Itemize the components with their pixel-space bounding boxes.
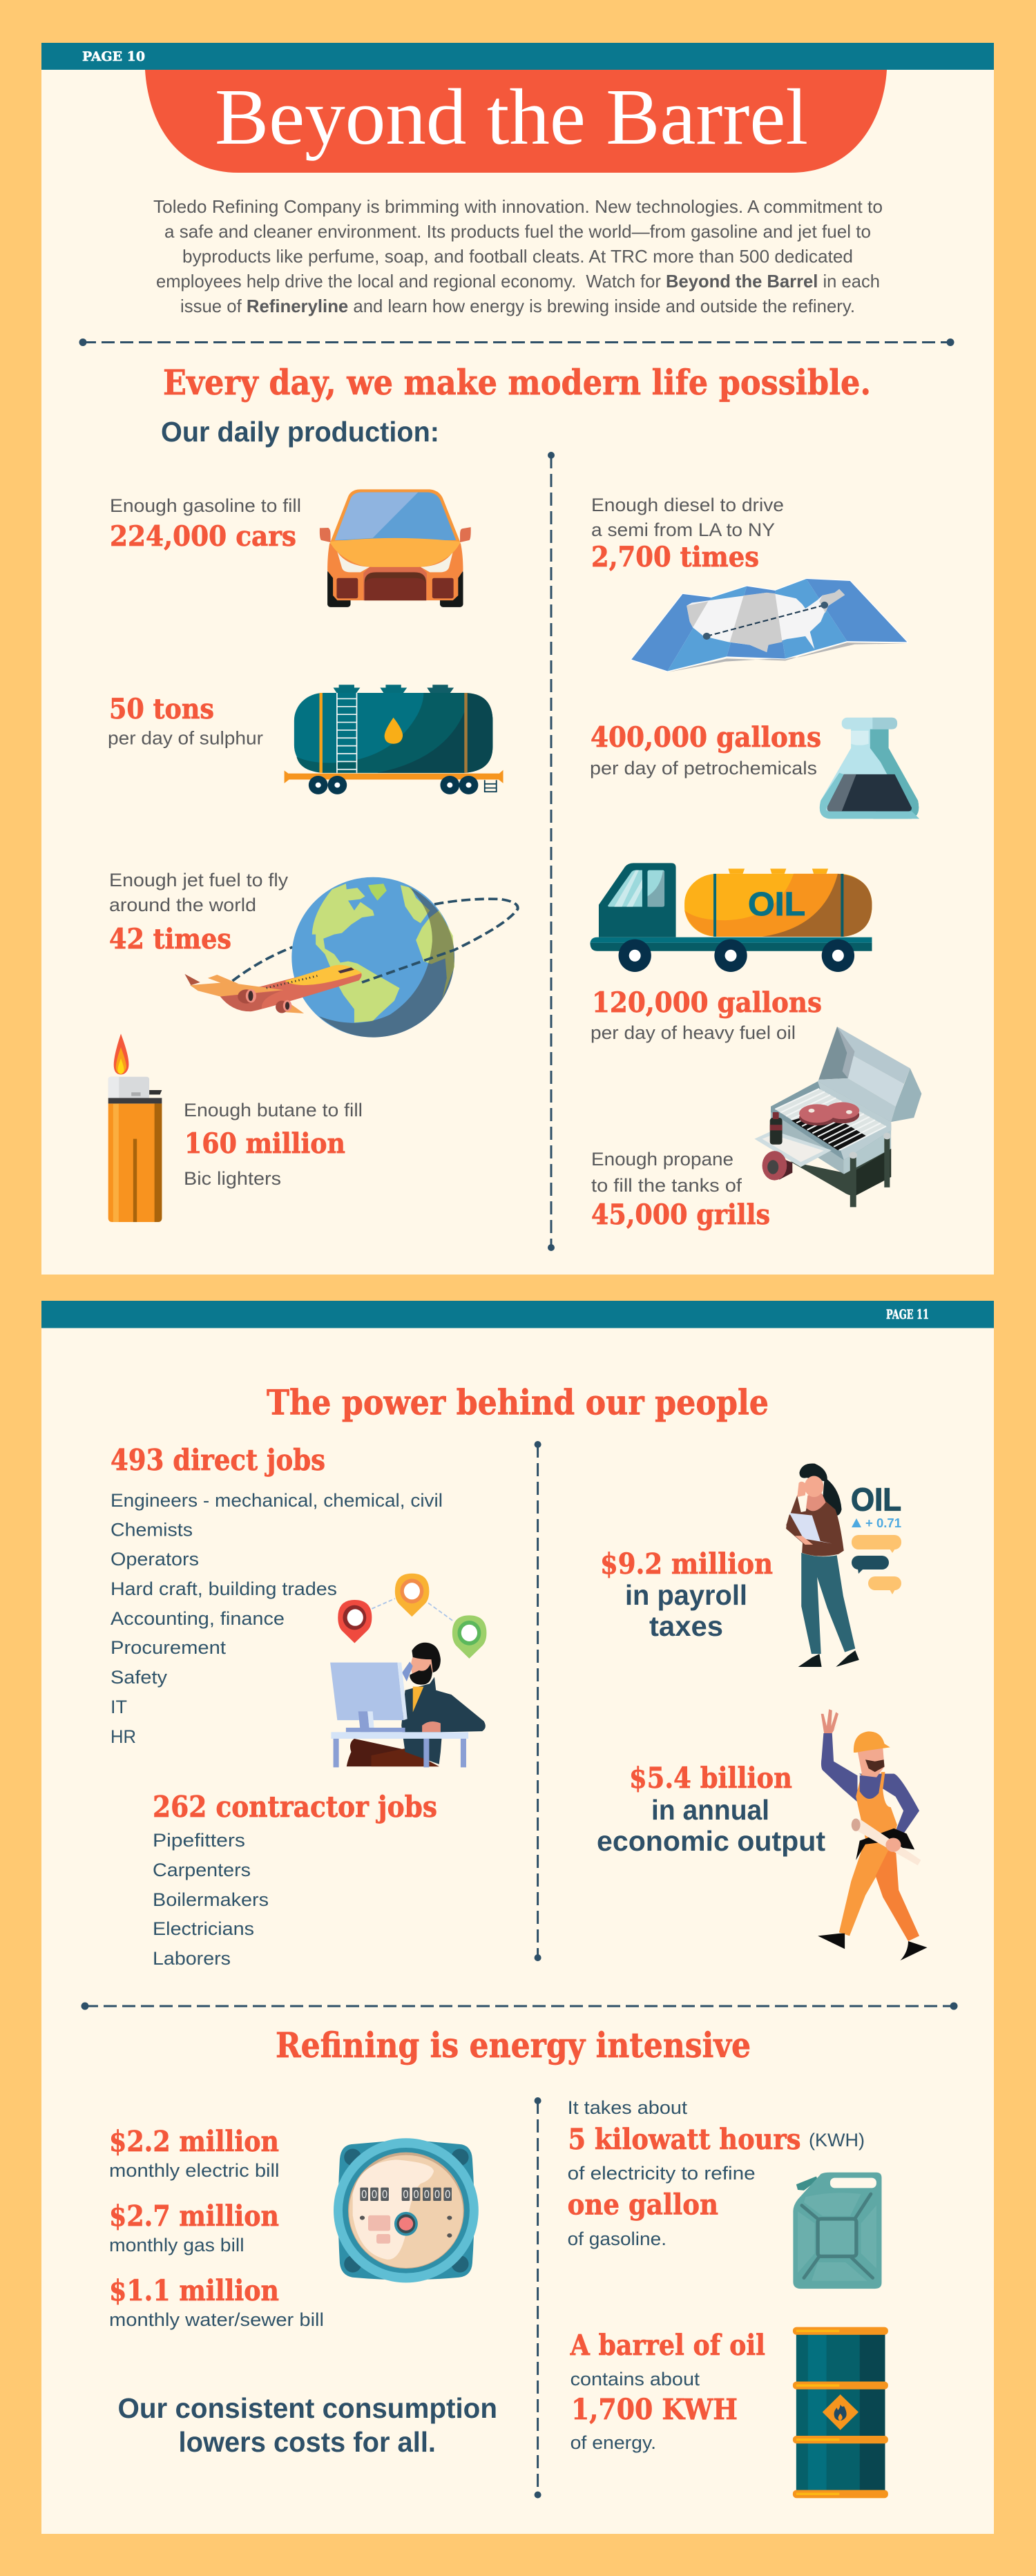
title banner xyxy=(145,70,887,173)
stat: diesel: 2,700 times xyxy=(591,541,759,573)
icon: globe and plane xyxy=(184,877,518,1038)
block: direct jobs: Safety xyxy=(111,1667,168,1688)
stat: kilowatt hours per gallon: one gallon xyxy=(568,2188,718,2222)
stat: kilowatt hours per gallon: It takes about xyxy=(568,2097,688,2118)
stat: economic output: in annual xyxy=(651,1794,769,1826)
block: contractor jobs: Boilermakers xyxy=(153,1889,269,1910)
stat: butane: 160 million xyxy=(184,1127,345,1160)
icon: construction worker xyxy=(818,1709,928,1960)
meter digits: 0 xyxy=(434,2188,440,2201)
block: contractor jobs: Carpenters xyxy=(153,1860,251,1880)
truck label: OIL: OIL xyxy=(748,886,805,923)
intro text block: issue of Refineryline and learn how energy is brewing inside and outside the refinery. xyxy=(180,296,855,316)
stat: petrochemicals: per day of petrochemicals xyxy=(590,758,817,779)
icon: grill xyxy=(754,1027,921,1207)
stat: kilowatt hours per gallon: 5 kilowatt hours xyxy=(568,2123,801,2156)
icon: car xyxy=(320,489,471,607)
intro text block: employees help drive the local and regional economy. Watch for Beyond the Barrel in each xyxy=(156,271,880,292)
block: contractor jobs: Laborers xyxy=(153,1948,231,1969)
stat: kilowatt hours per gallon: (KWH) xyxy=(809,2130,865,2150)
stat: barrel energy: A barrel of oil xyxy=(570,2329,765,2362)
stat: heavy fuel oil: 120,000 gallons xyxy=(592,986,822,1019)
block: direct jobs: Hard craft, building trades xyxy=(111,1578,337,1599)
meter digits: 0 xyxy=(361,2188,367,2201)
icon: plane xyxy=(184,965,362,1013)
intro text block: Toledo Refining Company is brimming with innovation. New technologies. A commitment to xyxy=(153,196,883,217)
icon: utility meter xyxy=(334,2138,479,2282)
stat: heavy fuel oil: per day of heavy fuel oil xyxy=(591,1022,796,1043)
graphic: OIL ticker and chat bubbles: OIL xyxy=(851,1481,901,1517)
icon: jerry can xyxy=(793,2173,881,2289)
stat: jet fuel xyxy=(109,870,289,955)
icon: lighter xyxy=(108,1033,162,1222)
block: contractor jobs: Electricians xyxy=(153,1918,254,1939)
stat: sulphur xyxy=(108,693,263,749)
block: direct jobs: 493 direct jobs xyxy=(111,1443,325,1477)
stat: barrel energy: contains about xyxy=(570,2369,700,2389)
block: direct jobs: Procurement xyxy=(111,1637,227,1658)
intro text block: byproducts like perfume, soap, and football cleats. At TRC more than 500 dedicated xyxy=(182,246,853,267)
stat: kilowatt hours per gallon: of electricity to refine xyxy=(568,2163,756,2184)
heading: refining is energy intensive: Refining is energy intensive xyxy=(276,2025,751,2065)
stat: petrochemicals xyxy=(590,721,821,779)
stat: monthly bills xyxy=(109,2125,324,2330)
stat: jet fuel: around the world xyxy=(109,895,256,915)
icon: oil truck xyxy=(590,863,872,972)
stat: payroll taxes: in payroll xyxy=(625,1579,747,1611)
stat: barrel energy: of energy. xyxy=(570,2432,656,2453)
stat: economic output xyxy=(597,1762,825,1857)
heading: every day: Every day, we make modern life possible. xyxy=(163,362,871,403)
stat: sulphur: per day of sulphur xyxy=(108,728,263,749)
stat: payroll taxes xyxy=(600,1547,773,1642)
stat: gasoline: Enough gasoline to fill xyxy=(110,495,301,516)
meter digits: 0 xyxy=(424,2188,430,2201)
stat: butane: Enough butane to fill xyxy=(184,1100,363,1120)
stat: propane: to fill the tanks of xyxy=(591,1175,742,1196)
meter digits: 0 xyxy=(403,2188,408,2201)
stat: barrel energy: 1,700 KWH xyxy=(571,2393,738,2426)
icon: tank rail car xyxy=(285,685,503,794)
intro text block: a safe and cleaner environment. Its products fuel the world—from gasoline and jet fuel to xyxy=(164,221,871,242)
meter digits: 0 xyxy=(372,2188,377,2201)
stat: payroll taxes: taxes xyxy=(649,1610,723,1642)
icon: man at computer with map pins xyxy=(330,1574,486,1767)
stat: monthly bills: monthly gas bill xyxy=(109,2235,244,2255)
stat: jet fuel: Enough jet fuel to fly xyxy=(109,870,289,890)
stat: economic output: $5.4 billion xyxy=(629,1762,792,1795)
stat: gasoline xyxy=(110,495,301,553)
stat: barrel energy xyxy=(570,2329,765,2453)
block: direct jobs: Accounting, finance xyxy=(111,1608,285,1629)
title banner: Beyond the Barrel xyxy=(215,73,808,161)
heading: our daily production: Our daily production: xyxy=(161,416,439,448)
heading: the power behind our people: The power behind our people xyxy=(267,1382,769,1423)
graphic: OIL ticker and chat bubbles xyxy=(851,1481,901,1594)
block: direct jobs xyxy=(111,1443,443,1747)
stat: payroll taxes: $9.2 million xyxy=(600,1547,773,1581)
stat: propane xyxy=(591,1149,770,1231)
stat: monthly bills: $1.1 million xyxy=(109,2274,279,2307)
icon: woman with tablet xyxy=(786,1464,859,1667)
stat: monthly bills: monthly water/sewer bill xyxy=(109,2309,324,2330)
callout: consistent consumption: lowers costs for all. xyxy=(178,2426,436,2458)
meter digits: 0 xyxy=(382,2188,387,2201)
header bar: page 11: PAGE 11 xyxy=(886,1307,929,1322)
stat: monthly bills: monthly electric bill xyxy=(109,2160,279,2181)
stat: kilowatt hours per gallon: of gasoline. xyxy=(568,2229,666,2249)
block: direct jobs: IT xyxy=(111,1697,127,1717)
stat: petrochemicals: 400,000 gallons xyxy=(591,721,821,754)
header bar: page 11 xyxy=(41,1301,994,1328)
stat: monthly bills: $2.7 million xyxy=(109,2200,279,2233)
icon: oil barrel xyxy=(793,2327,888,2498)
panel: page 10 xyxy=(41,43,994,1275)
block: direct jobs: Operators xyxy=(111,1549,199,1570)
stat: propane: 45,000 grills xyxy=(591,1199,770,1231)
stat: propane: Enough propane xyxy=(591,1149,733,1170)
block: contractor jobs: 262 contractor jobs xyxy=(153,1790,437,1824)
block: direct jobs: HR xyxy=(111,1726,136,1747)
block: contractor jobs xyxy=(153,1790,437,1969)
icon: flask xyxy=(820,718,919,819)
meter digits: 0 xyxy=(445,2188,450,2201)
stat: heavy fuel oil xyxy=(591,986,822,1043)
block: contractor jobs: Pipefitters xyxy=(153,1830,245,1851)
stat: butane: Bic lighters xyxy=(184,1168,281,1189)
callout: consistent consumption xyxy=(117,2392,497,2458)
header bar: page 10: PAGE 10 xyxy=(82,49,145,64)
meter digits: 0 xyxy=(414,2188,419,2201)
block: direct jobs: Engineers - mechanical, chemical, civil xyxy=(111,1490,443,1511)
intro text block xyxy=(153,196,883,316)
stat: economic output: economic output xyxy=(597,1825,825,1857)
stat: diesel: Enough diesel to drive xyxy=(591,495,784,515)
stat: gasoline: 224,000 cars xyxy=(110,520,296,553)
block: direct jobs: Chemists xyxy=(111,1520,193,1540)
stat: monthly bills: $2.2 million xyxy=(109,2125,279,2158)
stat: butane xyxy=(184,1100,363,1189)
meter digits xyxy=(360,2188,452,2201)
panel: page 11 xyxy=(41,1301,994,2534)
callout: consistent consumption: Our consistent consumption xyxy=(117,2392,497,2424)
stat: kilowatt hours per gallon xyxy=(568,2097,865,2249)
stat: jet fuel: 42 times xyxy=(109,923,231,955)
stat: sulphur: 50 tons xyxy=(109,693,214,725)
icon: US map xyxy=(631,579,907,672)
graphic: OIL ticker and chat bubbles: + 0.71 xyxy=(865,1516,901,1530)
stat: diesel: a semi from LA to NY xyxy=(591,519,775,540)
header bar: page 10 xyxy=(41,43,994,70)
stat: diesel xyxy=(591,495,784,573)
